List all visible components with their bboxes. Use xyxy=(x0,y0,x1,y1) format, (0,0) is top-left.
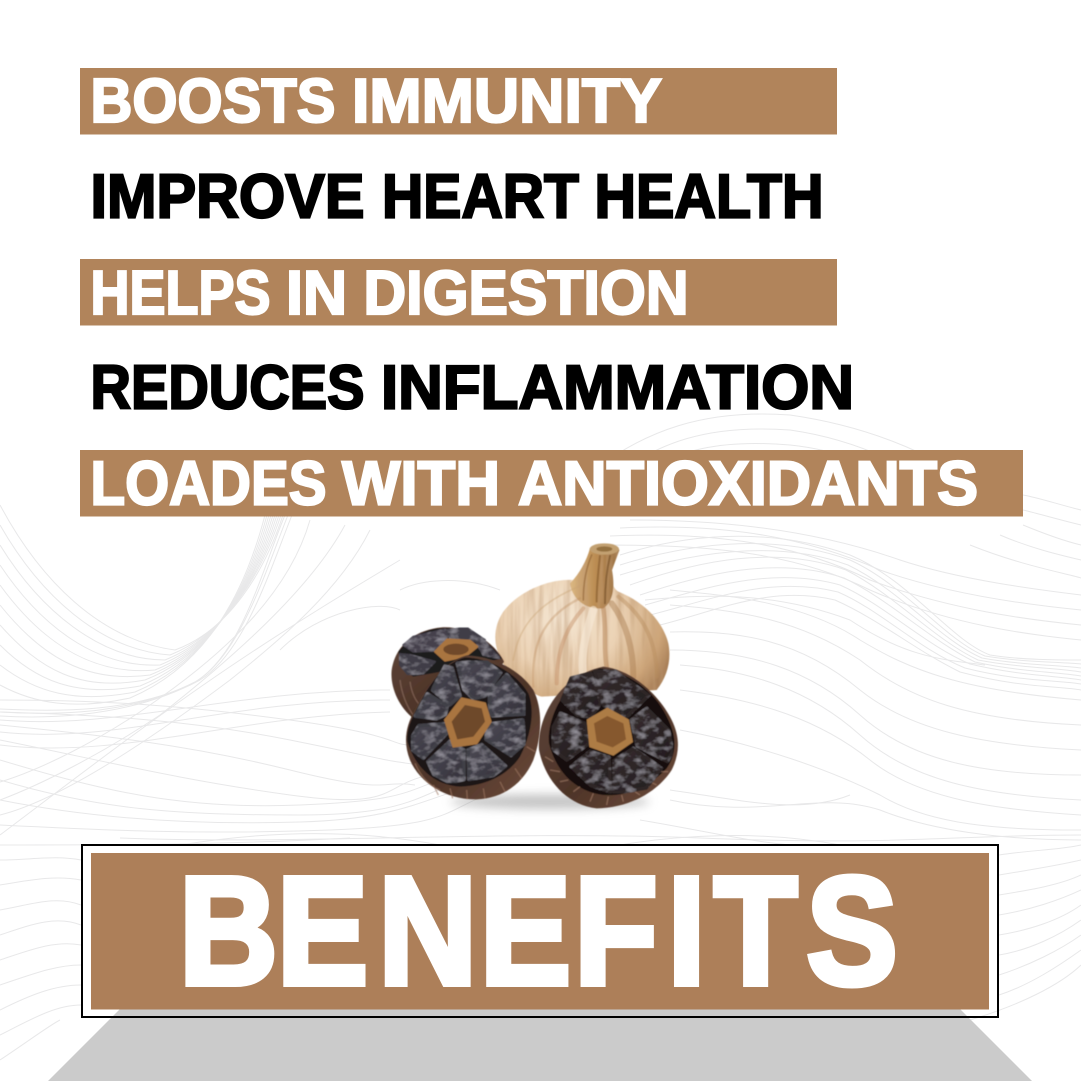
benefit row: improve heart health: HEALTH xyxy=(594,162,824,232)
benefit row: boosts immunity: IMMUNITY xyxy=(352,67,662,136)
banner fill xyxy=(91,853,989,1010)
background: flowing contour lines xyxy=(0,414,1081,1060)
banner frame xyxy=(82,845,998,1017)
benefit row: boosts immunity: BOOSTS xyxy=(90,67,336,136)
garlic illustration xyxy=(391,543,678,809)
benefit row: helps in digestion xyxy=(80,259,837,328)
halved black garlic: front left xyxy=(406,655,540,799)
banner heading: BENEFITS xyxy=(179,845,898,1017)
benefit row: helps in digestion: DIGESTION xyxy=(364,259,688,328)
benefit row: loades with antioxidants: WITH xyxy=(342,450,500,518)
ground shadow xyxy=(450,794,650,809)
grey trapezoid base xyxy=(48,1009,1032,1081)
benefit row: improve heart health: IMPROVE xyxy=(90,162,364,232)
halved black garlic: front right xyxy=(539,667,678,808)
benefit row: improve heart health xyxy=(90,162,824,232)
benefit row: reduces inflammation: INFLAMMATION xyxy=(381,354,854,422)
benefit row: reduces inflammation xyxy=(90,354,854,422)
benefit row: helps in digestion: IN xyxy=(286,259,347,328)
benefits banner xyxy=(82,845,998,1017)
benefit row: loades with antioxidants: ANTIOXIDANTS xyxy=(518,450,978,518)
benefit row: loades with antioxidants xyxy=(80,450,1023,518)
whole white garlic bulb xyxy=(495,543,669,697)
benefit row: loades with antioxidants: LOADES xyxy=(90,450,326,518)
benefit row: reduces inflammation: REDUCES xyxy=(90,354,364,422)
benefit row: boosts immunity xyxy=(80,67,837,136)
benefit row: helps in digestion: HELPS xyxy=(90,259,270,328)
halved black garlic: back left xyxy=(391,627,504,722)
benefit row: improve heart health: HEART xyxy=(382,162,579,232)
